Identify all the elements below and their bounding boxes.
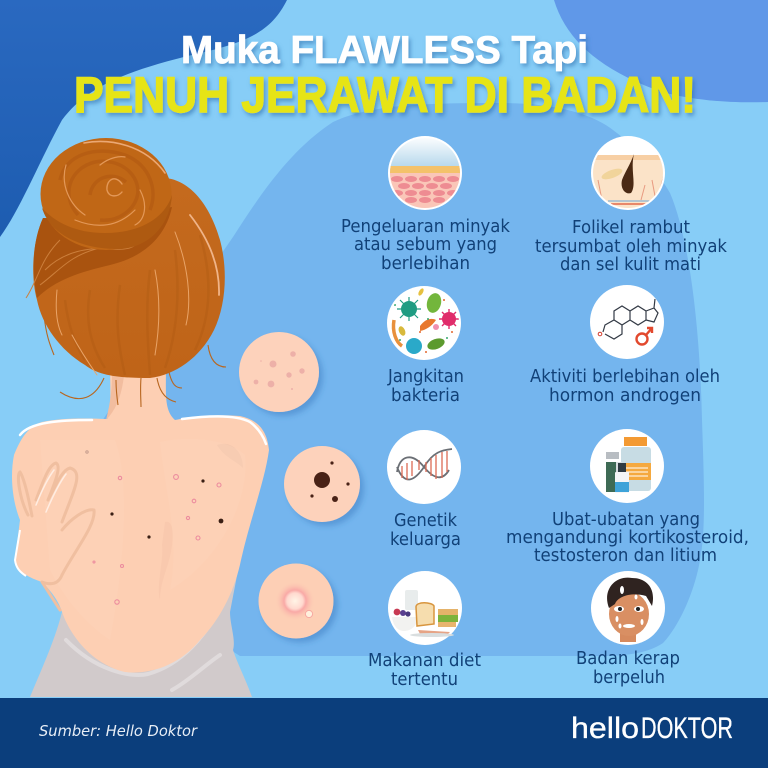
wisps under bun <box>26 240 135 298</box>
logo: DOKTOR <box>641 712 733 745</box>
icon: DNA helix <box>387 430 461 504</box>
label: excess sebum: berlebihan <box>381 254 470 274</box>
acne spots on back <box>86 451 221 604</box>
male symbol <box>636 328 652 344</box>
arm highlight <box>15 530 26 576</box>
head of hair <box>33 178 225 378</box>
label: excess sebum: Pengeluaran minyak <box>341 217 511 237</box>
icon: androgen molecule <box>590 285 664 359</box>
towel folds <box>66 590 230 690</box>
title line 2: PENUH JERAWAT DI BADAN! <box>74 67 696 123</box>
label: bacterial infection: Jangkitan <box>387 367 464 387</box>
stray hair neck <box>44 315 226 407</box>
source credit: Sumber: Hello Doktor <box>39 722 199 740</box>
lighter back panels <box>40 439 246 640</box>
background shape: mid blue blob <box>90 103 704 656</box>
finger highlights <box>36 470 66 512</box>
small whitehead <box>305 610 313 618</box>
label: diet <box>368 651 481 690</box>
label: diet: tertentu <box>391 670 458 690</box>
neck shadow <box>106 375 124 420</box>
small pimple marks <box>254 351 305 390</box>
skin closeup: blackheads <box>284 446 360 522</box>
label: sweating <box>576 649 680 688</box>
logo <box>571 712 733 745</box>
label: medications <box>506 510 749 566</box>
label: bacterial infection <box>387 367 464 406</box>
label: clogged follicle: Folikel rambut <box>572 218 690 238</box>
label: excess sebum <box>341 217 511 274</box>
fingers outline <box>18 463 94 610</box>
icon: bacteria <box>387 286 461 360</box>
logo: hello <box>571 712 639 745</box>
icon: medicine bottles <box>590 429 664 503</box>
spine shading <box>159 522 173 600</box>
background shape: periwinkle top right <box>554 0 768 102</box>
label: androgen activity: Aktiviti berlebihan oleh <box>530 367 720 387</box>
hand <box>18 463 94 610</box>
hair strands <box>65 235 208 375</box>
label: androgen activity: hormon androgen <box>549 386 701 406</box>
right edge hair highlight <box>190 215 219 295</box>
skin closeup: inflamed pimple <box>258 564 334 638</box>
label: sweating: Badan kerap <box>576 649 680 669</box>
label: androgen activity <box>530 367 720 406</box>
back and shoulders <box>12 415 269 673</box>
shoulder highlight left <box>20 420 92 435</box>
background shape: dark blue top left <box>0 0 287 237</box>
towel <box>30 560 252 697</box>
label: clogged follicle: tersumbat oleh minyak <box>535 237 728 257</box>
label: excess sebum: atau sebum yang <box>354 235 497 255</box>
dark spots on back <box>110 479 223 539</box>
bun highlights <box>64 142 165 225</box>
label: clogged follicle <box>535 218 728 275</box>
hair bun <box>40 138 172 250</box>
shoulder blade shading <box>217 444 243 468</box>
title line 1: Muka FLAWLESS Tapi <box>181 29 588 72</box>
label: medications: testosteron dan litium <box>534 546 717 566</box>
label: medications: mengandungi kortikosteroid, <box>506 528 749 548</box>
icon: food <box>388 571 462 645</box>
darker hair under bun <box>34 207 172 298</box>
label: diet: Makanan diet <box>368 651 481 671</box>
label: clogged follicle: dan sel kulit mati <box>560 255 701 275</box>
icon: skin layers <box>388 136 462 210</box>
inflamed glow <box>275 581 315 621</box>
label: medications: Ubat-ubatan yang <box>552 510 700 530</box>
label: bacterial infection: bakteria <box>391 386 460 406</box>
icon: sweating boy <box>591 571 665 645</box>
label: genetics: Genetik <box>394 511 458 531</box>
label: genetics <box>390 511 461 550</box>
bun swirl shade <box>60 151 153 220</box>
footer bar <box>0 698 768 768</box>
shoulder highlight right <box>182 416 266 444</box>
hair highlights <box>56 232 189 375</box>
woman seen from behind <box>12 138 269 697</box>
label: sweating: berpeluh <box>593 668 665 688</box>
label: genetics: keluarga <box>390 530 461 550</box>
bun shade <box>42 195 172 249</box>
icon: hair follicle <box>590 136 666 210</box>
neck <box>107 365 175 420</box>
moles <box>310 461 350 502</box>
title <box>74 29 696 123</box>
skin closeup: red pimples <box>239 332 319 412</box>
